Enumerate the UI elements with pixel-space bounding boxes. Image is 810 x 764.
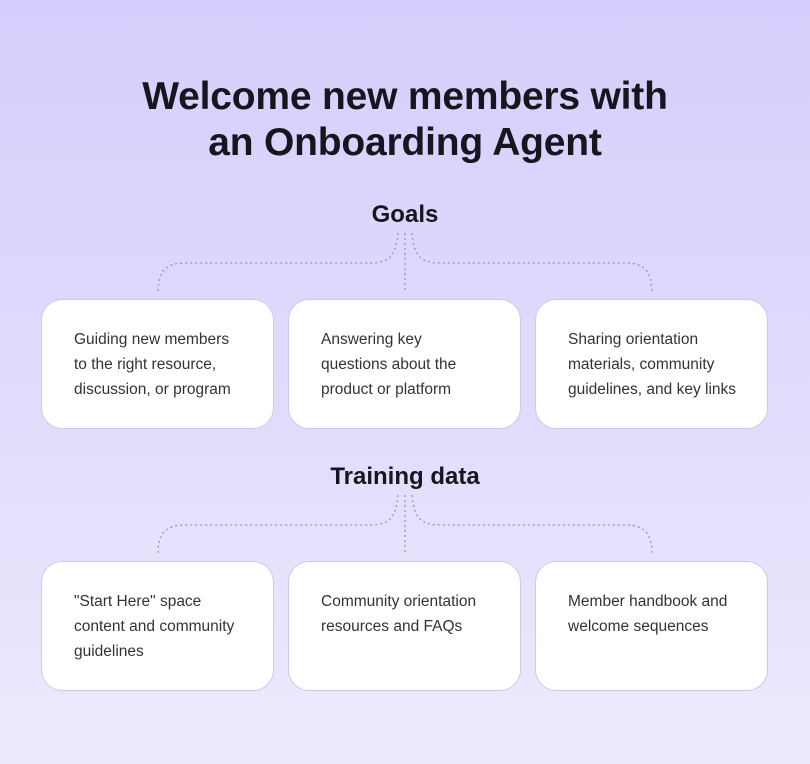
card: goal 2: product or platform: [321, 381, 451, 398]
heading: training data: Training data: [330, 463, 480, 490]
card: training 2: Community orientation: [321, 593, 476, 610]
card: training 2: [289, 562, 520, 690]
card: goal 1: [42, 300, 273, 428]
card: goal 1: to the right resource,: [74, 356, 216, 373]
card: goal 1: discussion, or program: [74, 381, 231, 398]
card: training 2: resources and FAQs: [321, 618, 462, 635]
card: training 1: [42, 562, 273, 690]
card: goal 3: [536, 300, 767, 428]
card: training 1: content and community: [74, 618, 234, 635]
heading: goals: Goals: [372, 201, 438, 228]
card: training 3: Member handbook and: [568, 593, 727, 610]
card: training 3: welcome sequences: [568, 618, 708, 635]
card: goal 2: Answering key: [321, 331, 422, 348]
card: goal 3: Sharing orientation: [568, 331, 698, 348]
card: goal 3: guidelines, and key links: [568, 381, 736, 398]
card: training 1: "Start Here" space: [74, 593, 201, 610]
title: Welcome new members with: [142, 75, 668, 118]
card: training 1: guidelines: [74, 643, 144, 660]
card: goal 3: materials, community: [568, 356, 714, 373]
card: goal 2: [289, 300, 520, 428]
card: training 3: [536, 562, 767, 690]
card: goal 2: questions about the: [321, 356, 456, 373]
title: an Onboarding Agent: [208, 121, 602, 164]
title: [142, 75, 668, 164]
card: goal 1: Guiding new members: [74, 331, 229, 348]
